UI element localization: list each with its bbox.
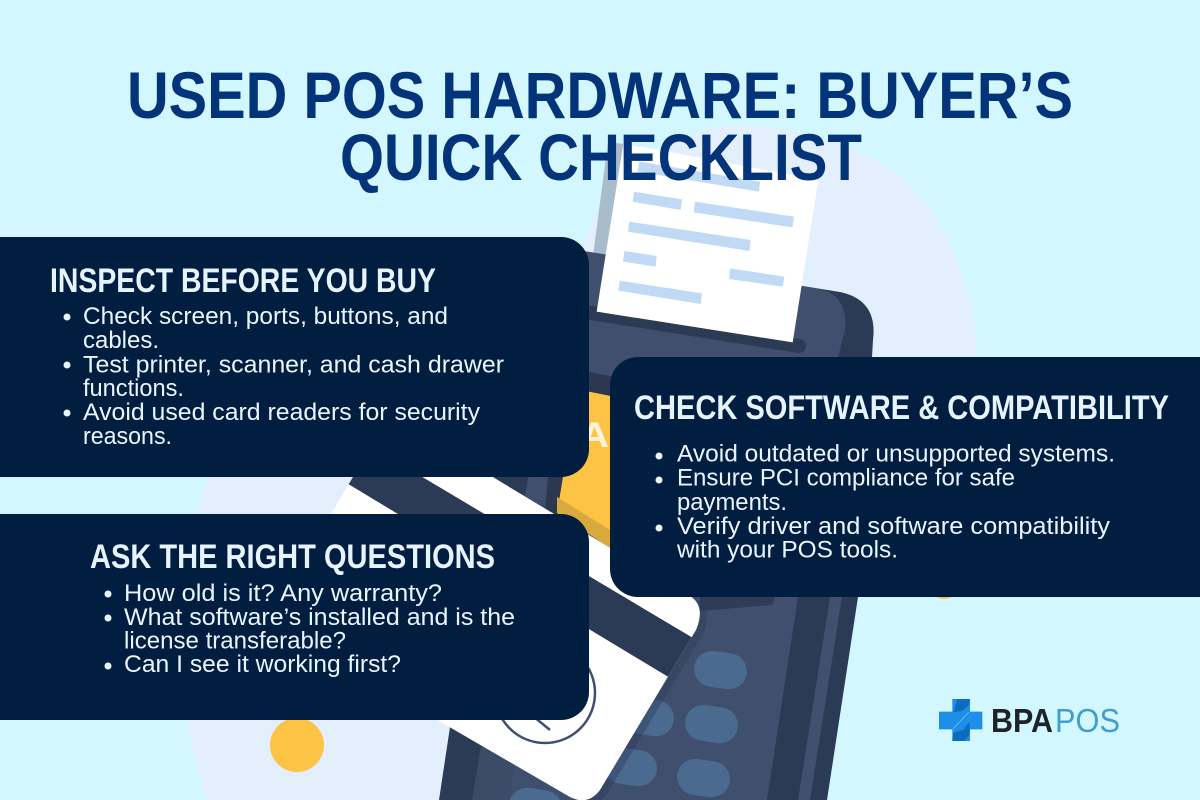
logo: BPA POS: POS <box>1055 702 1120 739</box>
title: QUICK CHECKLIST <box>340 120 862 194</box>
checklist: inspect: cables. <box>83 327 159 354</box>
icon: medical cross <box>939 699 982 741</box>
yellow circle: left <box>270 718 324 772</box>
logo: BPA POS <box>939 699 1120 741</box>
checklist: inspect: functions. <box>83 375 184 402</box>
checklist: software: Ensure PCI compliance for safe <box>677 464 1015 492</box>
title: USED POS HARDWARE: BUYER’S <box>127 58 1073 132</box>
checklist: inspect <box>64 303 504 450</box>
checklist: inspect: Check screen, ports, buttons, and <box>83 303 448 330</box>
panel: ask the right questions <box>0 514 589 720</box>
logo: BPA POS: BPA <box>991 702 1053 739</box>
panel: check software and compatibility <box>610 357 1200 597</box>
receipt <box>597 143 818 342</box>
checklist: questions: How old is it? Any warranty? <box>124 580 442 607</box>
checklist: inspect: Test printer, scanner, and cash drawer <box>83 352 504 378</box>
checklist: software <box>656 440 1115 564</box>
checklist: software: Verify driver and software compatibility <box>677 513 1110 540</box>
POS terminal: A <box>580 416 609 455</box>
checklist: inspect: reasons. <box>83 423 172 450</box>
POS terminal <box>439 240 874 800</box>
background blob <box>182 126 977 800</box>
checklist: questions: license transferable? <box>124 628 346 654</box>
checklist: software: Avoid outdated or unsupported systems. <box>677 440 1115 468</box>
checklist: software: with your POS tools. <box>676 536 898 564</box>
heading: inspect: INSPECT BEFORE YOU BUY <box>50 262 436 300</box>
checklist: questions <box>104 580 515 678</box>
title <box>127 58 1073 194</box>
checklist: questions: Can I see it working first? <box>124 651 401 678</box>
checklist: questions: What software’s installed and is the <box>124 604 515 631</box>
panel: inspect before you buy <box>0 237 589 477</box>
yellow circle: right <box>928 567 960 599</box>
heading: questions: ASK THE RIGHT QUESTIONS <box>90 538 495 576</box>
checklist: software: payments. <box>677 489 787 516</box>
credit card <box>331 477 706 800</box>
checklist: inspect: Avoid used card readers for security <box>83 399 480 426</box>
receipt shadow <box>593 142 640 260</box>
